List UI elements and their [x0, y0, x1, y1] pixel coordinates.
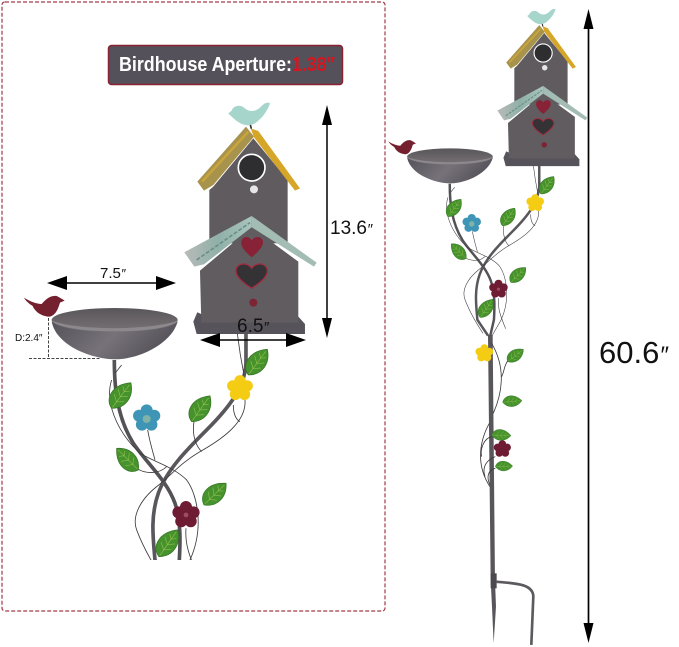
heart opening	[236, 264, 267, 288]
vines and stems	[110, 333, 246, 583]
red heart	[241, 237, 263, 257]
dimension: total height 60.6 inches: 60.6″	[599, 335, 669, 370]
dimension: house height 13.6 inches: 13.6″	[330, 218, 373, 239]
birdhouse lower body	[200, 227, 298, 323]
dimension: house height 13.6 inches	[322, 105, 373, 338]
entrance hole	[238, 154, 265, 181]
full product photo	[388, 9, 587, 645]
dimension: bowl depth: D:2.4″	[15, 333, 43, 344]
dimension: base width 6.5 inches	[200, 316, 306, 347]
dimension: bowl depth	[15, 318, 101, 358]
lower zinc roof	[184, 216, 317, 267]
stake pole and garden prong	[475, 335, 533, 645]
dimension: base width 6.5 inches: 6.5″	[237, 316, 269, 337]
teal bird on roof	[228, 103, 270, 129]
dimension: total height 60.6 inches	[584, 9, 669, 643]
aperture label badge: Birdhouse Aperture:	[119, 54, 292, 76]
perch peg	[250, 185, 258, 193]
birdhouse base	[193, 312, 305, 334]
leaves and flowers	[104, 344, 274, 562]
aperture label badge	[108, 46, 342, 84]
upper gold roof	[197, 127, 300, 191]
red bird on bowl	[24, 296, 65, 317]
close-up product photo: birdhouse, bowl and vines	[24, 103, 317, 583]
small red flower peg	[249, 299, 257, 307]
bird bath bowl	[52, 308, 178, 359]
aperture label badge: 1.38″	[292, 54, 335, 76]
dimension: bowl width 7.5 inches: 7.5″	[100, 265, 126, 282]
dimension: bowl width 7.5 inches	[47, 265, 176, 290]
reduced birdhouse, bowl and vines	[388, 9, 587, 336]
panel: close-up detail frame	[2, 2, 385, 611]
birdhouse upper body	[209, 138, 288, 243]
